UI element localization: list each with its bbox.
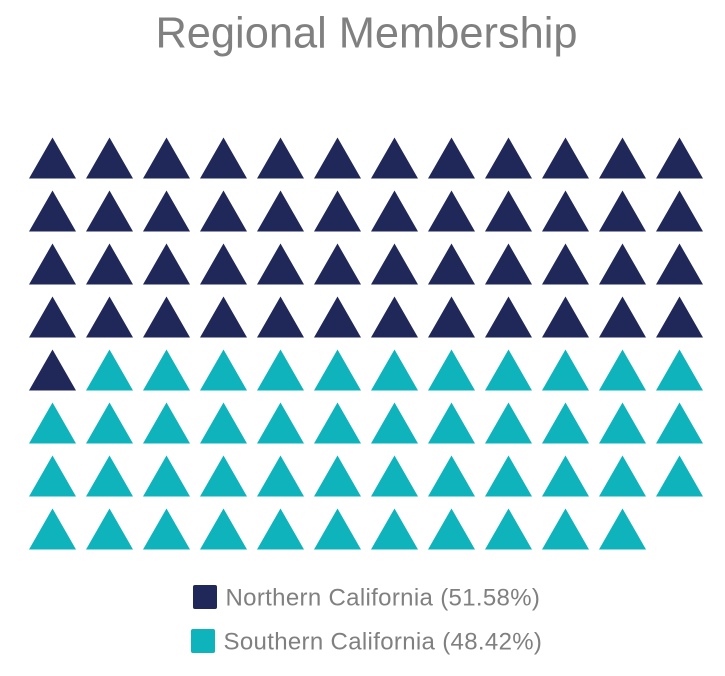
legend <box>191 584 542 656</box>
title: Regional Membership <box>155 10 578 58</box>
row 2: Northern California <box>29 190 703 232</box>
row 1: Northern California <box>29 138 703 178</box>
row 5: Southern California <box>86 350 703 390</box>
row 8: Southern California <box>29 508 646 550</box>
legend item: Northern California: Northern California (51.58%) <box>226 584 540 612</box>
row 4: Northern California <box>29 296 703 338</box>
row 6: Southern California <box>29 402 703 444</box>
row 5: last Northern California triangle <box>29 350 76 390</box>
row 7: Southern California <box>29 456 703 496</box>
row 3: Northern California <box>29 244 703 284</box>
legend item: Southern California: Southern California (48.42%) <box>224 628 542 656</box>
pictogram chart: triangles <box>29 138 703 550</box>
